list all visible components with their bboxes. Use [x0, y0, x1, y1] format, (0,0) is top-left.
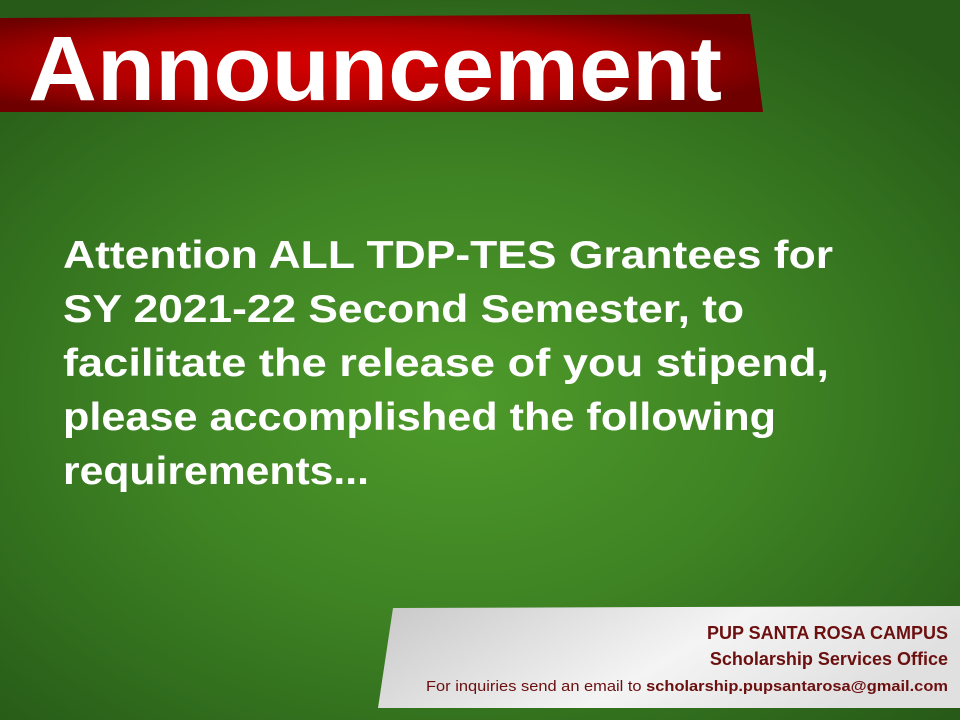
body text	[63, 234, 833, 493]
body text: facilitate the release of you stipend,	[63, 342, 829, 385]
footer panel	[378, 606, 960, 708]
body text: SY 2021-22 Second Semester, to	[63, 288, 744, 331]
title banner	[0, 14, 763, 120]
body text: requirements...	[63, 450, 369, 493]
footer: campus: PUP SANTA ROSA CAMPUS	[707, 623, 948, 643]
body text: Attention ALL TDP-TES Grantees for	[63, 234, 833, 277]
body text: please accomplished the following	[63, 396, 776, 439]
title: Announcement	[28, 18, 722, 120]
footer: contact: For inquiries send an email to scholarship.pupsantarosa@gmail.com	[426, 679, 948, 695]
footer: office: Scholarship Services Office	[710, 649, 948, 669]
